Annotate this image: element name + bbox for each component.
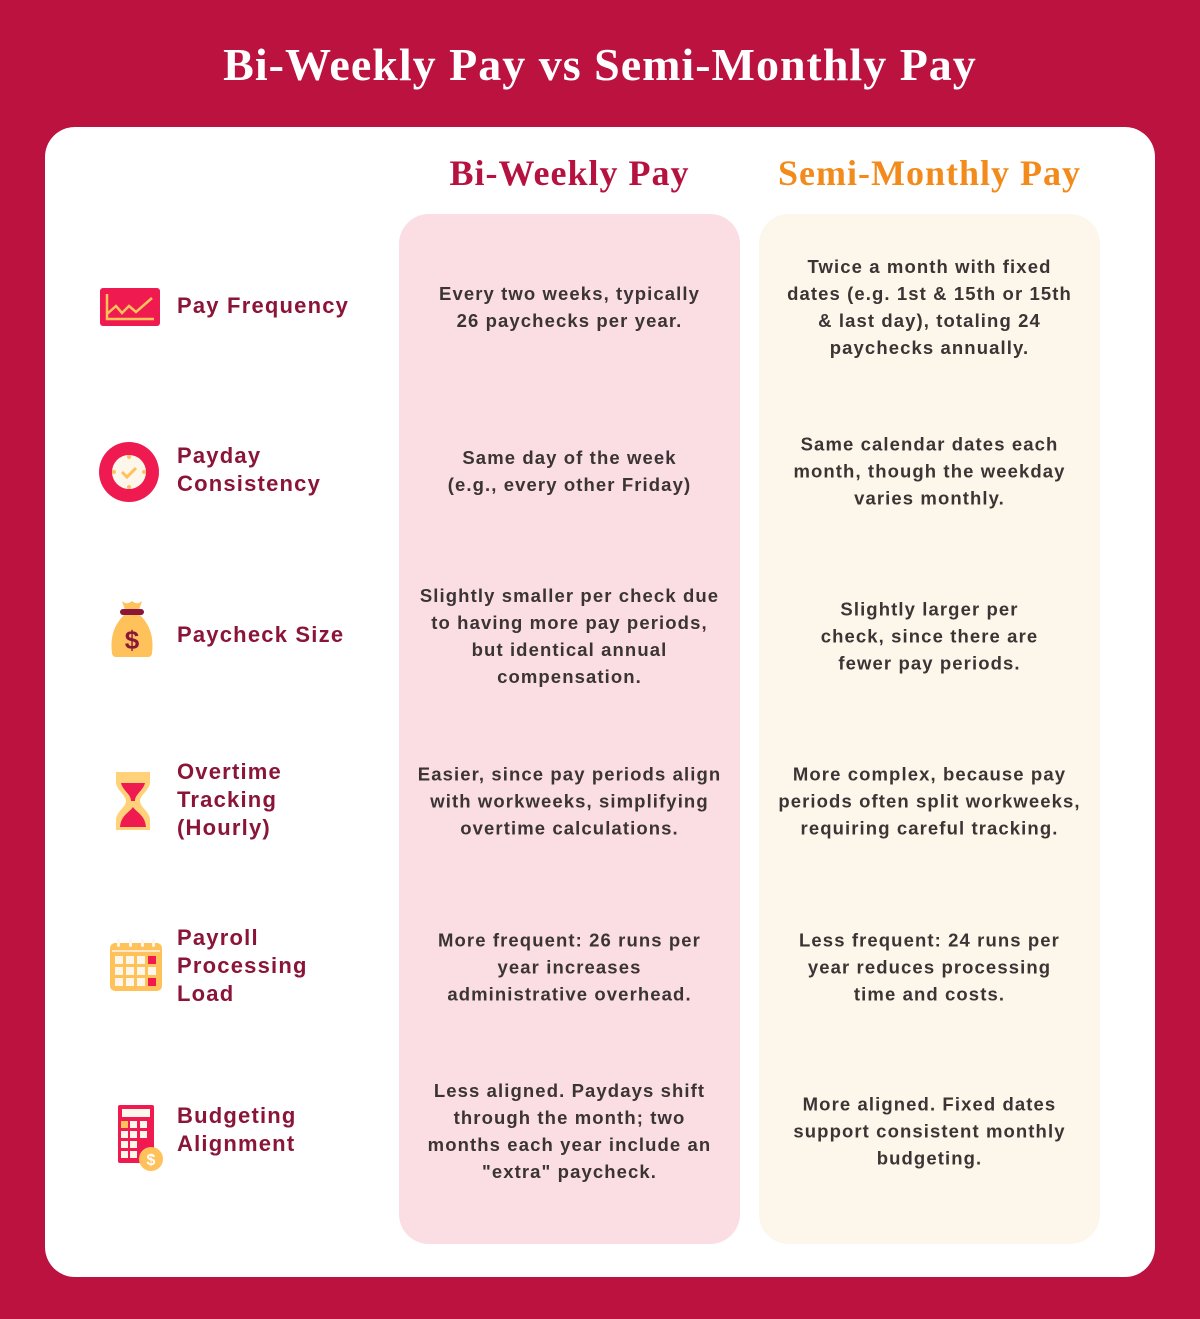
- icon: money bag: [112, 601, 152, 657]
- icon: money bag: $: [125, 625, 140, 655]
- text: semi-monthly budgeting: budgeting.: [877, 1148, 982, 1168]
- label: overtime tracking: [177, 759, 282, 840]
- icon: hourglass: [116, 772, 150, 830]
- text: semi-monthly frequency: [787, 256, 1072, 358]
- heading: bi-weekly: Bi-Weekly Pay: [450, 153, 690, 193]
- text: bi-weekly processing: year increases: [498, 956, 641, 978]
- text: bi-weekly size: compensation.: [497, 666, 642, 687]
- text: semi-monthly size: [821, 598, 1038, 674]
- column: bi-weekly background: [399, 214, 740, 1244]
- text: bi-weekly frequency: [439, 283, 700, 331]
- label: payroll processing load: Processing: [177, 953, 308, 978]
- column: semi-monthly background: [759, 214, 1100, 1244]
- text: bi-weekly size: Slightly smaller per check due: [420, 585, 719, 606]
- text: bi-weekly overtime: overtime calculations.: [460, 818, 679, 838]
- text: bi-weekly frequency: Every two weeks, typically: [439, 283, 700, 304]
- label: overtime tracking: (Hourly): [177, 815, 271, 840]
- title: Bi-Weekly Pay vs Semi-Monthly Pay: [223, 39, 977, 90]
- text: bi-weekly budgeting: Less aligned. Paydays shift: [434, 1080, 705, 1101]
- text: bi-weekly processing: [438, 930, 701, 1004]
- label: pay frequency: Pay Frequency: [177, 293, 349, 318]
- text: bi-weekly size: but identical annual: [472, 639, 667, 660]
- text: semi-monthly size: Slightly larger per: [840, 598, 1019, 620]
- text: bi-weekly overtime: Easier, since pay periods align: [418, 764, 721, 784]
- label: payday consistency: [177, 443, 321, 496]
- text: bi-weekly budgeting: through the month; two: [454, 1107, 685, 1128]
- text: bi-weekly budgeting: months each year include an: [428, 1134, 711, 1155]
- label: payday consistency: Payday: [177, 443, 261, 468]
- label: payday consistency: Consistency: [177, 471, 321, 496]
- text: semi-monthly budgeting: [793, 1094, 1066, 1168]
- text: semi-monthly frequency: & last day), totaling 24: [818, 310, 1041, 331]
- label: budgeting alignment: Budgeting: [177, 1103, 297, 1128]
- text: bi-weekly consistency: (e.g., every other Friday): [448, 474, 691, 495]
- text: bi-weekly processing: More frequent: 26 runs per: [438, 930, 701, 950]
- text: semi-monthly budgeting: More aligned. Fixed dates: [803, 1094, 1056, 1114]
- text: semi-monthly overtime: periods often split workweeks,: [778, 790, 1081, 812]
- text: semi-monthly frequency: paychecks annually.: [830, 337, 1029, 358]
- text: bi-weekly consistency: [448, 447, 691, 495]
- text: semi-monthly overtime: More complex, because pay: [793, 764, 1066, 784]
- text: semi-monthly size: check, since there are: [821, 626, 1038, 646]
- text: bi-weekly budgeting: "extra" paycheck.: [482, 1161, 657, 1182]
- text: bi-weekly frequency: 26 paychecks per year.: [457, 310, 682, 331]
- text: semi-monthly consistency: month, though the weekday: [793, 460, 1066, 482]
- text: semi-monthly budgeting: support consistent monthly: [793, 1120, 1066, 1142]
- text: bi-weekly overtime: with workweeks, simplifying: [430, 790, 709, 812]
- label: payroll processing load: Payroll: [177, 925, 259, 950]
- text: semi-monthly size: fewer pay periods.: [838, 652, 1021, 674]
- icon: calendar: [110, 939, 162, 991]
- icon: calculator: $: [147, 1152, 156, 1169]
- text: semi-monthly consistency: Same calendar dates each: [801, 434, 1058, 454]
- text: semi-monthly processing: Less frequent: 24 runs per: [799, 930, 1060, 950]
- text: semi-monthly overtime: requiring careful tracking.: [801, 818, 1058, 838]
- label: budgeting alignment: [177, 1103, 297, 1156]
- label: overtime tracking: Tracking: [177, 787, 277, 812]
- heading: semi-monthly: Semi-Monthly Pay: [778, 153, 1081, 193]
- text: semi-monthly processing: year reduces processing: [808, 956, 1051, 978]
- text: semi-monthly processing: time and costs.: [854, 984, 1005, 1004]
- text: semi-monthly processing: [799, 930, 1060, 1004]
- text: semi-monthly frequency: Twice a month with fixed: [808, 256, 1051, 277]
- text: bi-weekly overtime: [418, 764, 721, 838]
- text: bi-weekly processing: administrative overhead.: [447, 984, 692, 1004]
- text: semi-monthly frequency: dates (e.g. 1st & 15th or 15th: [787, 283, 1072, 304]
- text: bi-weekly size: [420, 585, 719, 687]
- label: payroll processing load: Load: [177, 981, 234, 1006]
- text: bi-weekly consistency: Same day of the week: [462, 447, 677, 468]
- icon: calculator: [118, 1105, 163, 1171]
- label: payroll processing load: [177, 925, 308, 1006]
- text: semi-monthly overtime: [778, 764, 1081, 838]
- text: semi-monthly consistency: varies monthly.: [854, 488, 1005, 508]
- label: budgeting alignment: Alignment: [177, 1131, 295, 1156]
- text: bi-weekly budgeting: [428, 1080, 711, 1182]
- text: semi-monthly consistency: [793, 434, 1066, 508]
- icon: clock: [99, 442, 159, 502]
- label: paycheck size: Paycheck Size: [177, 622, 344, 647]
- icon: chart: [100, 288, 160, 326]
- text: bi-weekly size: to having more pay periods,: [431, 612, 708, 633]
- label: overtime tracking: Overtime: [177, 759, 282, 784]
